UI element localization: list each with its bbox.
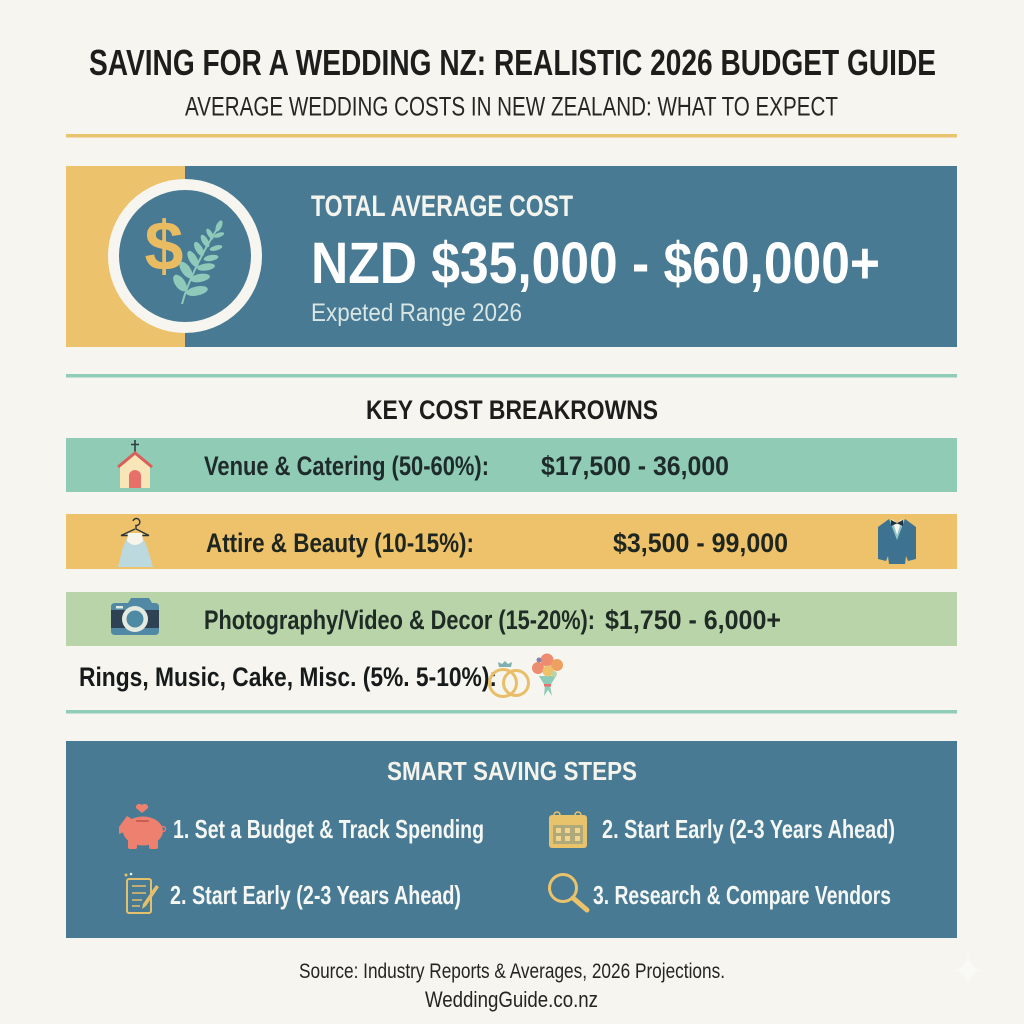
caption: expected range: Expeted Range 2026 [311,299,522,327]
heading: key cost breakdowns: KEY COST BREAKROWNS [366,395,658,425]
row: attire and beauty: Attire & Beauty (10-15%): [206,528,474,558]
icon: notepad and pencil [124,873,159,913]
panel: total average cost [66,166,957,347]
row: photography video and decor [66,592,957,646]
icon: wedding rings [490,661,528,696]
row: venue and catering [66,438,957,492]
subtitle: AVERAGE WEDDING COSTS IN NEW ZEALAND: WHAT TO EXPECT [185,92,838,122]
icon: camera [111,598,159,635]
row: venue and catering: $17,500 - 36,000 [541,451,729,481]
icon: dress on hanger [118,519,153,567]
icon: magnifying glass [550,874,587,910]
label: total average cost: TOTAL AVERAGE COST [311,190,573,223]
cost range: NZD $35,000 - $60,000+ [311,231,880,296]
icon: dollar and fern badge [114,184,256,328]
icon: piggy bank [119,804,166,849]
icon: chapel [118,440,152,488]
icon: calendar [549,812,587,848]
website: WeddingGuide.co.nz [425,987,598,1012]
step 2: start early, right column: 2. Start Early (2-3 Years Ahead) [602,814,895,844]
row: rings, music, cake, misc: Rings, Music, Cake, Misc. (5%. 5-10%): [79,662,497,692]
panel: smart saving steps [66,741,957,938]
row: attire and beauty: $3,500 - 99,000 [613,528,788,558]
source line: Source: Industry Reports & Averages, 2026 Projections. [299,960,725,983]
step 3: research vendors: 3. Research & Compare Vendors [593,880,891,910]
row: rings, music, cake, misc [79,654,563,696]
heading: smart saving steps: SMART SAVING STEPS [387,756,637,786]
icon: dollar and fern badge: $ [145,207,183,285]
row: venue and catering: Venue & Catering (50-60%): [204,451,489,481]
icon: tuxedo jacket [878,519,916,564]
icon: bouquet [532,654,563,696]
step 1: set a budget: 1. Set a Budget & Track Spending [173,814,484,844]
row: photography video and decor: Photography/Video & Decor (15-20%): [204,605,595,635]
row: photography video and decor: $1,750 - 6,000+ [605,605,781,635]
step 2: start early, left column: 2. Start Early (2-3 Years Ahead) [170,880,461,910]
row: attire and beauty [66,514,957,569]
